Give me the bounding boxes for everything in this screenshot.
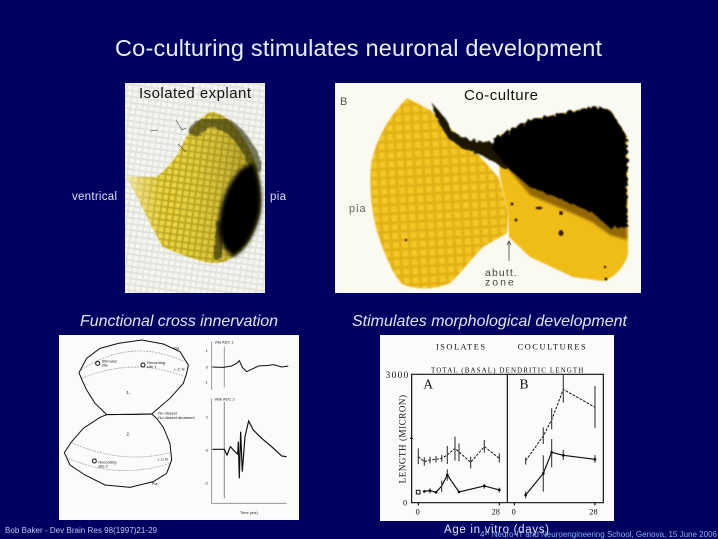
panel: cross innervation drawing and traces: -2 — [204, 481, 209, 486]
label: ventrical: ventrical — [72, 191, 117, 203]
axis labels: B — [520, 376, 529, 391]
sites and labels: No dissect — [158, 411, 178, 416]
label: B: B — [340, 96, 347, 108]
sites and labels: site 1 — [147, 364, 157, 369]
axis labels: 0 — [512, 508, 516, 517]
axis labels: LENGTH (MICRON) — [398, 395, 408, 483]
series: cocultures solid — [526, 452, 595, 495]
panel: isolated explant photo — [125, 83, 265, 293]
panel: cross innervation drawing and traces: 0 — [206, 448, 209, 453]
chart headings: ISOLATES — [436, 342, 485, 351]
panel: cross innervation drawing and traces: Vita ADC 1 — [214, 339, 235, 344]
sites and labels: 1. — [126, 390, 130, 395]
chart headings: TOTAL (BASAL) DENDRITIC LENGTH — [431, 367, 583, 375]
label: co-culture: Co-culture — [464, 87, 538, 104]
panel: dendritic length chart — [380, 335, 614, 521]
sites and labels: Pia — [152, 481, 158, 486]
caption: functional cross innervation: Functional cross innervation — [80, 313, 278, 330]
axis labels: 28 — [492, 508, 500, 517]
axis labels: 28 — [589, 508, 598, 517]
chart headings: COCULTURES — [518, 342, 586, 351]
black stained region — [490, 107, 627, 228]
arrow: abutment zone — [507, 241, 511, 261]
scattered spots — [405, 202, 608, 280]
sites and labels: Pia — [173, 345, 180, 350]
sites and labels: Stimulus — [102, 359, 117, 364]
label: abutt. zone: abutt. — [485, 267, 518, 279]
sites and labels: L.C.N — [174, 367, 185, 372]
axis labels: 0 — [403, 498, 407, 507]
sites and labels: No dissect abutment — [158, 415, 196, 420]
footer: citation: Bob Baker - Dev Brain Res 98(1997)21-29 — [5, 526, 158, 535]
dotted layers — [68, 351, 184, 471]
right lobe — [497, 107, 628, 281]
label: isolated explant: Isolated explant — [139, 85, 252, 102]
axis labels: A — [423, 376, 433, 391]
sites and labels: L.C.N — [158, 457, 168, 462]
series: cocultures dashed — [526, 389, 595, 461]
series: isolates dashed — [416, 374, 595, 498]
panel: co-culture photo — [335, 83, 641, 293]
axis caption: age in vitro: Age in vitro (days) — [444, 524, 549, 536]
stray fibres — [150, 120, 186, 152]
footer: school and date: Neuro-IT and Neuroengineering School, Genova, 15 June 2006 — [489, 530, 718, 539]
chart headings — [431, 342, 586, 375]
series: isolates solid — [424, 475, 499, 492]
panel: cross innervation drawing and traces: Time (ms) — [240, 510, 258, 515]
axis labels: 0 — [416, 508, 420, 517]
label: abutt. zone: zone — [485, 276, 516, 288]
panel: cross innervation drawing and traces — [59, 335, 299, 520]
axes — [410, 374, 603, 505]
title: Co-culturing stimulates neuronal development — [115, 35, 602, 61]
axis labels — [386, 371, 598, 517]
left lobe — [370, 98, 508, 288]
sites and labels: Recording — [147, 360, 165, 365]
caption: stimulates morphological development: Stimulates morphological development — [352, 313, 628, 330]
slice outlines — [64, 340, 188, 487]
panel: cross innervation drawing and traces: 1 — [206, 348, 209, 353]
sites and labels: 2. — [126, 431, 130, 436]
data markers — [423, 451, 596, 496]
brown halo under black region — [505, 165, 627, 240]
label: pia: pia — [270, 191, 287, 203]
sites and labels: Recording — [98, 459, 117, 464]
panel: cross innervation drawing and traces: 0 — [206, 364, 209, 369]
label: pia in photo: pia — [349, 203, 367, 215]
panel: cross innervation drawing and traces: -1 — [204, 379, 209, 384]
axis labels: 3000 — [386, 371, 409, 381]
panel: cross innervation drawing and traces: 2 — [206, 414, 209, 419]
sites and labels: site — [102, 363, 109, 368]
explant tissue — [127, 112, 261, 263]
footer: school and date: th — [484, 531, 489, 537]
footer: school and date: 4 — [480, 530, 484, 539]
dark fibres between lobes — [432, 103, 512, 170]
panel: cross innervation drawing and traces: Vetk ADC 2 — [214, 397, 235, 402]
traces — [212, 342, 288, 503]
sites and labels: site 2 — [98, 463, 109, 468]
sites and labels — [92, 345, 196, 486]
